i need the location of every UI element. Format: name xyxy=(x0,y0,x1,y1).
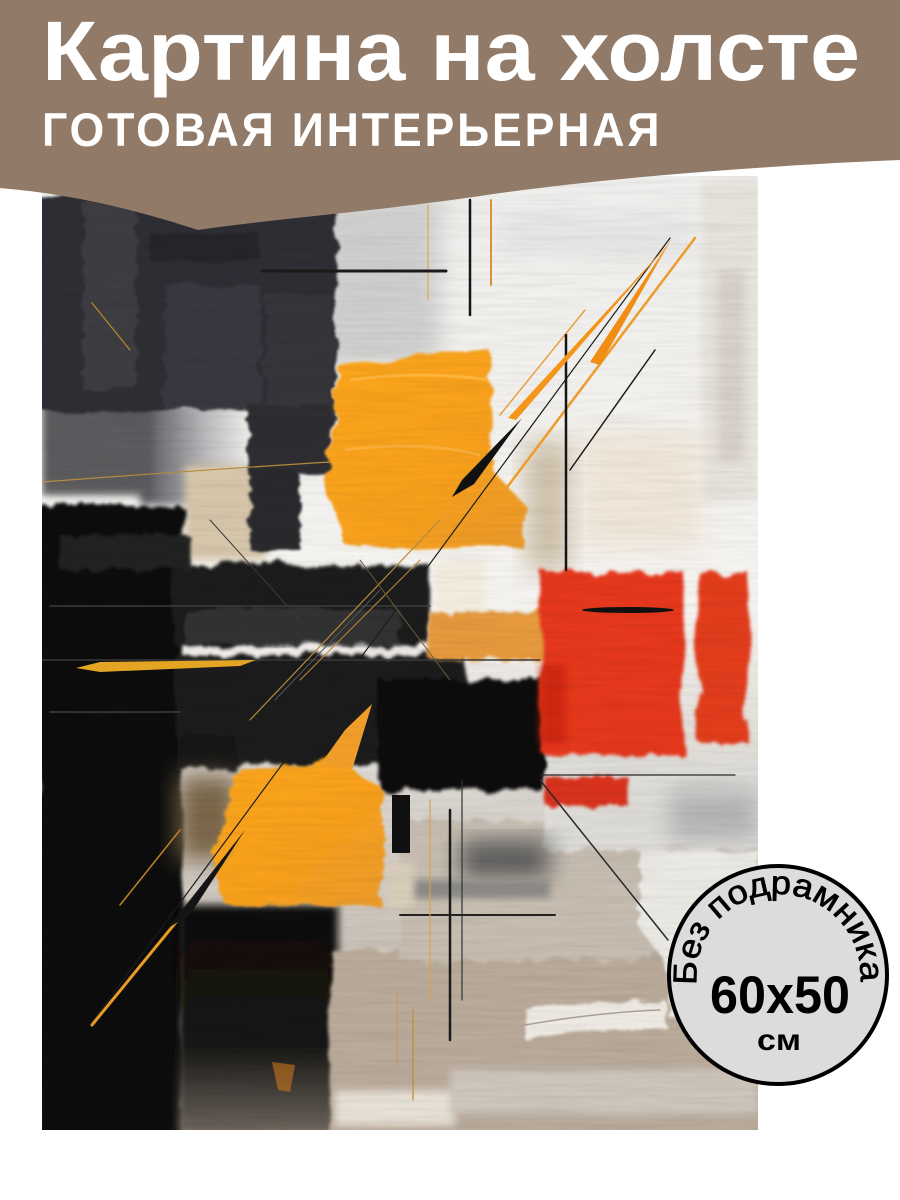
badge size number: 60x50 xyxy=(710,966,850,1025)
subtitle: ГОТОВАЯ ИНТЕРЬЕРНАЯ xyxy=(42,104,659,156)
white impasto strokes xyxy=(525,850,760,1040)
black and orange tapered strokes xyxy=(76,238,672,928)
yellow-orange upper block xyxy=(325,350,525,550)
badge curved label: Без подрамника xyxy=(673,876,878,982)
header banner xyxy=(0,0,900,230)
title: Картина на холсте xyxy=(42,4,860,98)
abstract painting xyxy=(36,176,770,1145)
yellow-orange lower block xyxy=(212,745,384,906)
paint strokes and lines xyxy=(42,200,735,1100)
lower beige field xyxy=(330,755,770,1140)
dark upper blocks xyxy=(36,196,336,550)
size badge xyxy=(667,864,889,1086)
black left column and middle band xyxy=(36,505,545,1145)
texture overlay xyxy=(190,176,758,1118)
badge unit: см xyxy=(757,1024,801,1057)
orange smear xyxy=(430,612,550,660)
red blocks xyxy=(542,572,748,806)
